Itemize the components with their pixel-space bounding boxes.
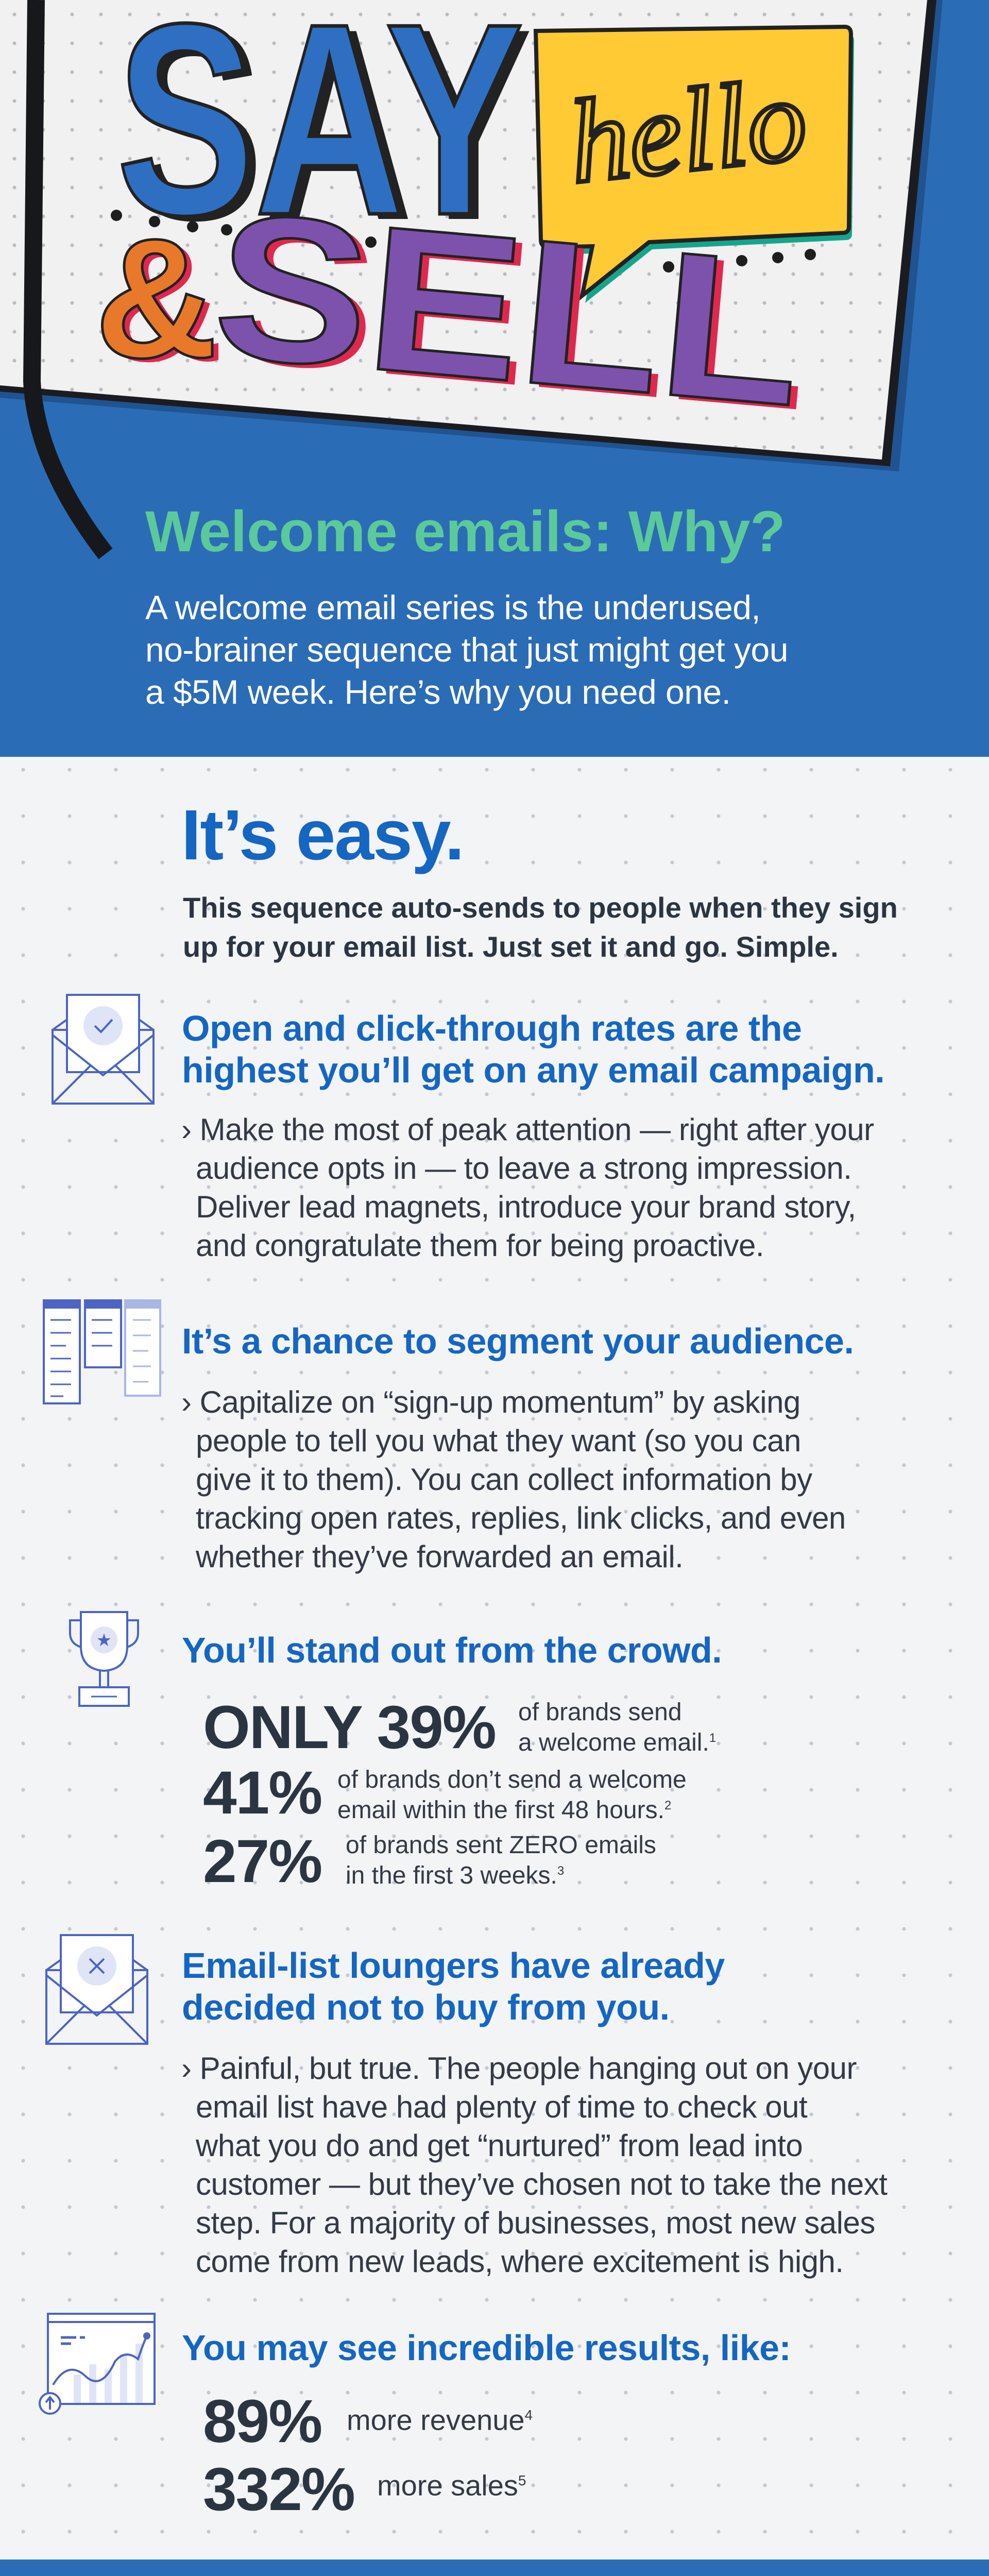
icon: trophy: ★ <box>96 1631 112 1650</box>
text: section 2 body: tracking open rates, replies, link clicks, and even <box>196 1501 846 1535</box>
icon: segment columns <box>43 1299 161 1404</box>
stat: 27%: in the first 3 weeks.3 <box>346 1862 564 1889</box>
icon: trophy <box>69 1611 139 1707</box>
text: section 1 body: Deliver lead magnets, introduce your brand story, <box>196 1190 856 1224</box>
speech bubble hello <box>536 27 854 303</box>
text: section 2 body: › Capitalize on “sign-up momentum” by asking <box>181 1385 800 1419</box>
icon: envelope x <box>45 1934 148 2045</box>
stat: 27%: of brands sent ZERO emails <box>346 1832 656 1859</box>
text: section 2 body <box>181 1385 846 1574</box>
text: section 4 body: customer — but they’ve chosen not to take the next <box>196 2167 887 2201</box>
heading: open and click-through: highest you’ll get on any email campaign. <box>182 1050 884 1090</box>
text: section 4 body: step. For a majority of businesses, most new sales <box>196 2206 875 2240</box>
intro paragraph: no-brainer sequence that just might get you <box>145 631 788 669</box>
stat: 41% <box>203 1759 687 1827</box>
stat: 27%: 27% <box>203 1827 321 1895</box>
text: section 1 body: audience opts in — to leave a strong impression. <box>196 1151 851 1185</box>
text: section 4 body: email list have had plenty of time to check out <box>196 2090 807 2124</box>
text: section 2 body: whether they’ve forwarded an email. <box>196 1539 683 1574</box>
stat: 89% revenue: more revenue4 <box>347 2404 533 2436</box>
stat: only 39% <box>203 1693 716 1761</box>
text: section 4 body: come from new leads, where excitement is high. <box>196 2244 844 2279</box>
header illustration: notebook with SAY hello & SELL <box>0 0 943 560</box>
SELL: SELL <box>207 168 811 449</box>
stat: 41%: email within the first 48 hours.2 <box>337 1797 671 1824</box>
stat: 41%: 41% <box>203 1759 321 1827</box>
stat: only 39%: a welcome email.1 <box>518 1729 716 1756</box>
intro paragraph: A welcome email series is the underused, <box>145 588 760 626</box>
text: section 2 body: people to tell you what they want (so you can <box>196 1423 801 1458</box>
stat: 41%: of brands don’t send a welcome <box>337 1766 687 1793</box>
intro paragraph: a $5M week. Here’s why you need one. <box>145 673 730 711</box>
stat: 332% sales: 332% <box>203 2455 354 2523</box>
heading: incredible results: You may see incredible results, like: <box>182 2328 791 2368</box>
stat: 89% revenue <box>203 2387 533 2455</box>
main content panel <box>0 757 989 2560</box>
stat: only 39%: ONLY 39% <box>203 1693 496 1761</box>
stat: 332% sales <box>203 2455 526 2523</box>
text: section 4 body: › Painful, but true. The people hanging out on your <box>181 2051 857 2086</box>
text: easy description: up for your email list. Just set it and go. Simple. <box>183 930 839 963</box>
stat: 89% revenue: 89% <box>203 2387 321 2455</box>
speech bubble hello: hello <box>563 53 812 208</box>
text: section 4 body: what you do and get “nurtured” from lead into <box>196 2128 803 2163</box>
text: section 1 body: and congratulate them for being proactive. <box>196 1228 764 1263</box>
dots row <box>111 210 816 273</box>
ampersand: & <box>95 203 217 393</box>
heading: Welcome emails: Why?: Welcome emails: Why? <box>145 499 786 564</box>
heading: segment audience: It’s a chance to segment your audience. <box>182 1321 854 1361</box>
ampersand: & <box>101 207 224 397</box>
icon: growth chart <box>39 2313 156 2415</box>
heading: stand out: You’ll stand out from the crowd. <box>182 1630 722 1670</box>
stat: only 39%: of brands send <box>518 1699 682 1726</box>
heading: open and click-through <box>182 1008 884 1090</box>
heading: email-list loungers: Email-list loungers have already <box>182 1945 725 1986</box>
heading: email-list loungers <box>182 1945 725 2027</box>
text: section 2 body: give it to them). You can collect information by <box>196 1462 812 1497</box>
heading: It's easy: It’s easy. <box>181 795 464 875</box>
heading: open and click-through: Open and click-through rates are the <box>182 1008 802 1048</box>
icon: envelope check <box>52 994 155 1105</box>
text: section 4 body <box>181 2051 887 2279</box>
text: section 1 body <box>181 1112 874 1263</box>
stat: 332% sales: more sales5 <box>377 2469 526 2502</box>
heading: email-list loungers: decided not to buy from you. <box>182 1987 670 2027</box>
text: section 1 body: › Make the most of peak attention — right after your <box>181 1112 874 1147</box>
ribbon bookmark <box>32 0 106 554</box>
text: easy description: This sequence auto-sends to people when they sign <box>183 891 898 924</box>
SELL: SELL <box>214 173 820 453</box>
text: easy description <box>183 891 898 963</box>
intro paragraph <box>145 588 788 711</box>
stat: 27% <box>203 1827 656 1895</box>
